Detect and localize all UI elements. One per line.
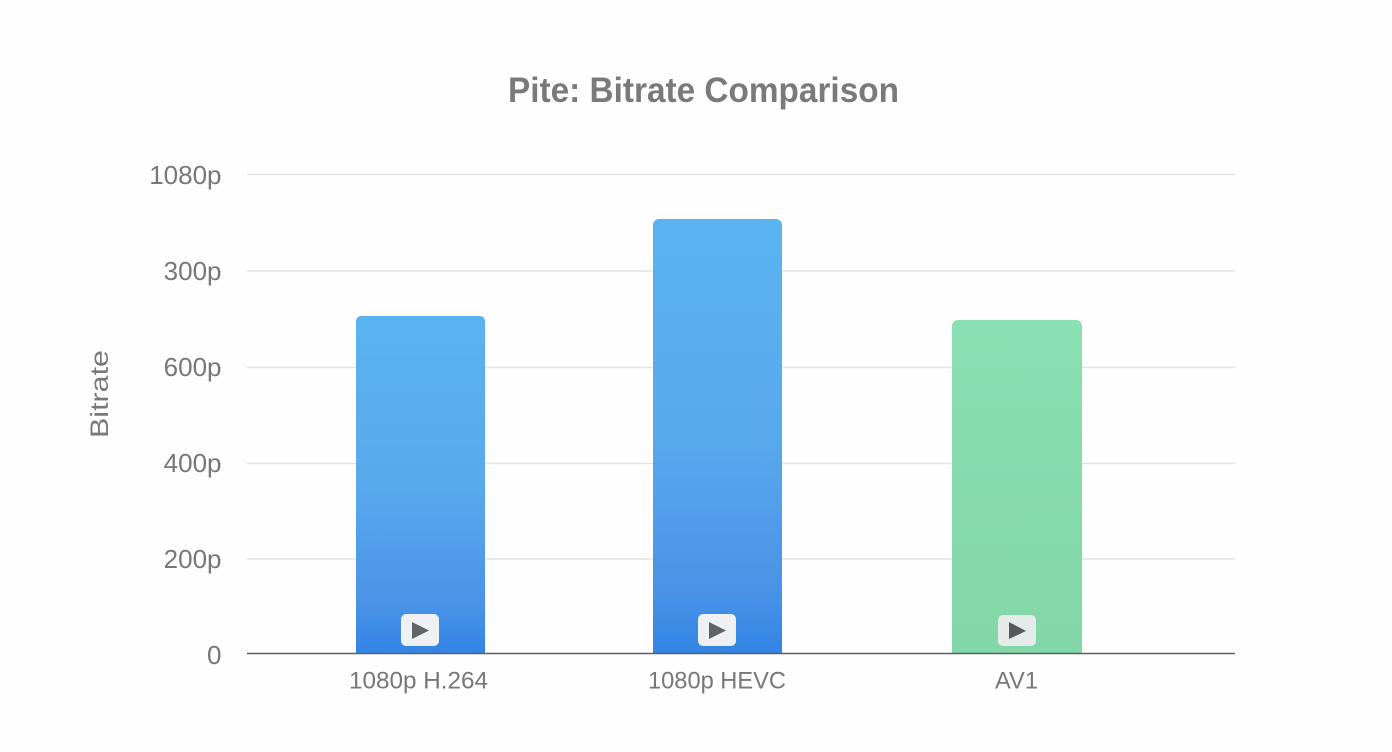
y-axis labels: 400p — [164, 448, 222, 478]
icon: play button — [998, 615, 1036, 646]
y-axis labels: 1080p — [149, 160, 222, 190]
bar: AV1 — [952, 320, 1082, 654]
y-axis title: Bitrate — [86, 350, 114, 438]
icon: play button — [401, 614, 439, 646]
bar: 1080p HEVC — [653, 219, 782, 654]
x-axis line — [247, 652, 1235, 654]
x-axis labels: AV1 — [995, 668, 1038, 694]
icon: play button — [698, 614, 736, 646]
y-axis labels: 0 — [207, 640, 222, 670]
x-axis labels — [349, 668, 1038, 694]
y-axis labels: 200p — [164, 544, 222, 574]
bar: 1080p H.264 — [356, 316, 485, 654]
title: Pite: Bitrate Comparison — [508, 71, 899, 110]
x-axis labels: 1080p H.264 — [349, 668, 488, 694]
y-axis labels: 600p — [164, 352, 222, 382]
x-axis labels: 1080p HEVC — [648, 668, 786, 694]
y-axis labels: 300p — [164, 256, 222, 286]
y-axis labels — [149, 160, 222, 670]
